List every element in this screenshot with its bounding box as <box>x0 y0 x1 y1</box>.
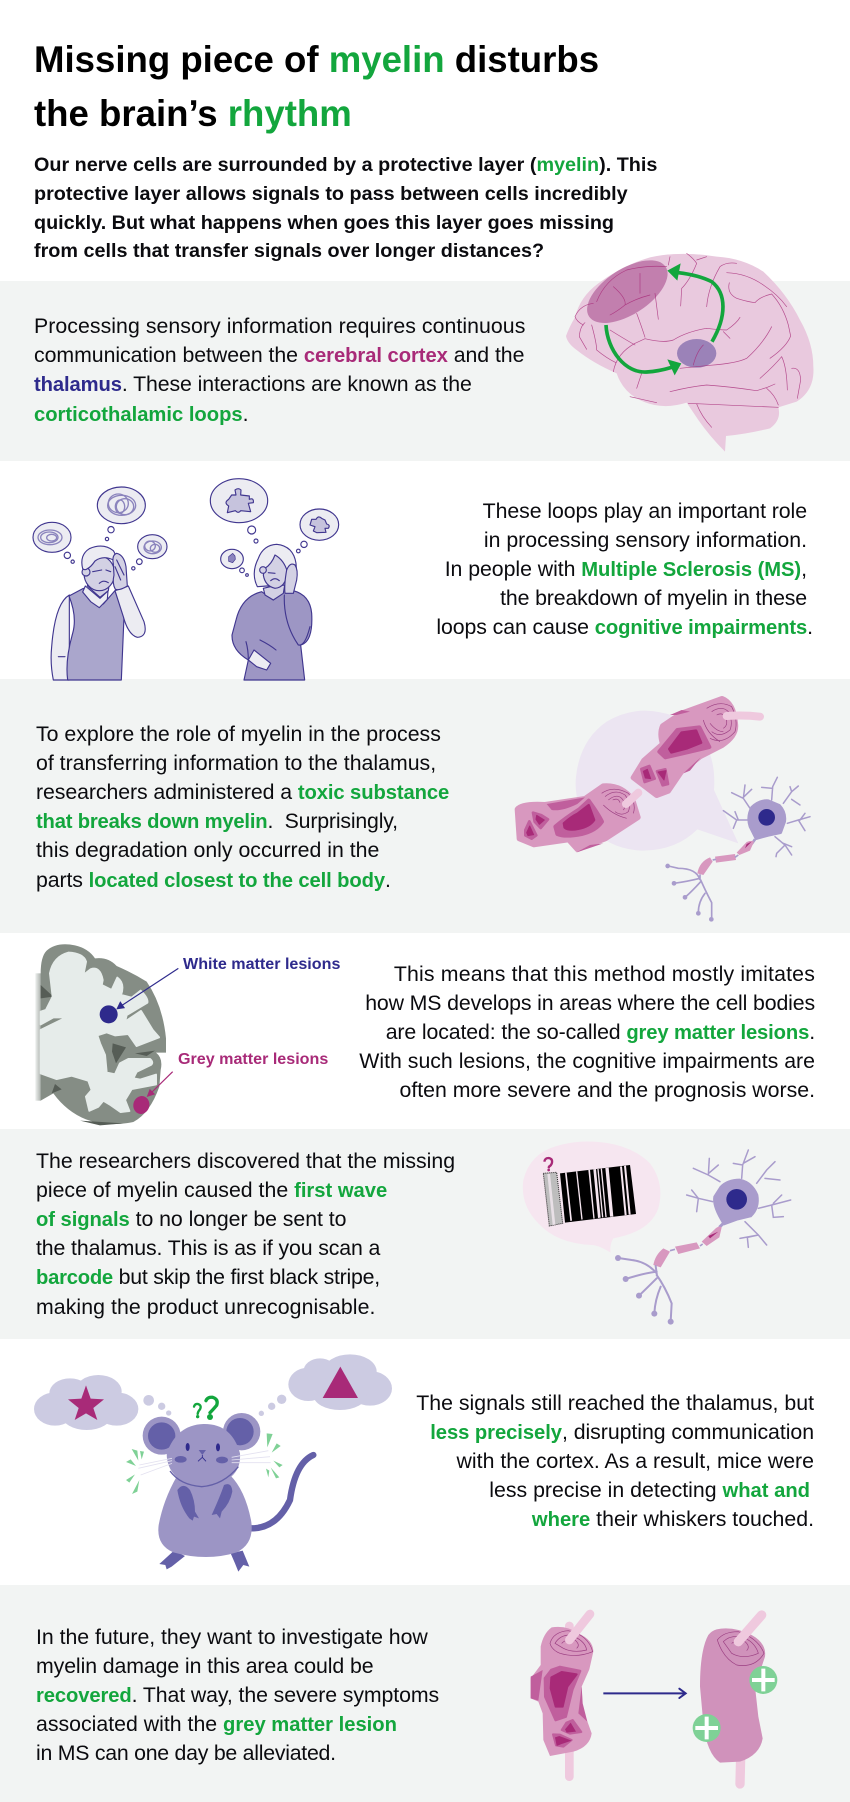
icon: confused mouse with thought clouds <box>34 1354 392 1572</box>
arrow: grey matter lesion pointer <box>148 1072 173 1096</box>
text: first wave barcode analogy: piece of myelin caused the first wave <box>36 1178 387 1202</box>
title: Missing piece of myelin disturbs <box>34 39 599 80</box>
speech bubble <box>576 711 738 851</box>
intro text: from cells that transfer signals over longer distances? <box>34 240 544 262</box>
text: first wave barcode analogy <box>36 1149 455 1319</box>
man <box>51 546 145 680</box>
text: future research: In the future, they want to investigate how <box>36 1625 428 1649</box>
text: mice whiskers: with the cortex. As a result, mice were <box>457 1449 814 1473</box>
label: white matter lesions: White matter lesions <box>183 955 340 973</box>
text: grey matter lesions explanation: how MS develops in areas where the cell bodies <box>365 991 815 1015</box>
background band: myelin section <box>0 679 850 933</box>
text: toxic substance experiment: parts located closest to the cell body. <box>36 868 391 892</box>
text: corticothalamic loops: thalamus. These interactions are known as the <box>34 372 472 396</box>
text: mice whiskers <box>416 1391 814 1531</box>
text: grey matter lesions explanation: This means that this method mostly imitates <box>394 962 815 986</box>
text: grey matter lesions explanation: are located: the so-called grey matter lesions. <box>386 1020 815 1044</box>
tail <box>252 1455 313 1528</box>
text: corticothalamic loops: communication between the cerebral cortex and the <box>34 343 524 367</box>
left cloud with star <box>34 1375 171 1430</box>
intro text: quickly. But what happens when goes this layer goes missing <box>34 212 614 234</box>
text: future research: associated with the grey matter lesion <box>36 1712 397 1736</box>
arrow <box>603 1689 686 1698</box>
question mark <box>544 1158 552 1168</box>
text: mice whiskers: where their whiskers touched. <box>532 1507 814 1531</box>
text: first wave barcode analogy: making the product unrecognisable. <box>36 1295 375 1319</box>
arrow: white matter lesion pointer <box>117 968 178 1009</box>
text: future research: myelin damage in this area could be <box>36 1654 373 1678</box>
background band: future section <box>0 1585 850 1802</box>
text: mice whiskers: The signals still reached the thalamus, but <box>416 1391 814 1415</box>
text: loops and MS <box>436 499 813 639</box>
icon: barcode bubble and neuron <box>523 1142 792 1325</box>
icon: demyelinated axon chunks and neuron in speech bubble <box>514 696 811 922</box>
intro text <box>34 154 657 262</box>
upper myelin chunk <box>633 699 760 795</box>
icon: worried man and woman with thought bubbles <box>32 478 340 681</box>
whiskers <box>138 1451 271 1475</box>
face <box>186 1443 190 1451</box>
head <box>167 1424 240 1486</box>
title: the brain’s rhythm <box>34 92 352 134</box>
man's thought bubbles <box>33 487 167 570</box>
whisker motion marks <box>126 1433 283 1494</box>
neuron <box>615 1150 791 1325</box>
axon connector <box>626 793 638 804</box>
text: corticothalamic loops <box>34 314 525 426</box>
text: toxic substance experiment: this degradation only occurred in the <box>36 838 379 862</box>
text: first wave barcode analogy: barcode but skip the first black stripe, <box>36 1265 380 1289</box>
woman's thought bubbles <box>210 479 339 576</box>
icon: brain with corticothalamic loop <box>566 253 814 452</box>
question marks <box>194 1397 217 1414</box>
woman <box>232 544 312 680</box>
text: toxic substance experiment: researchers administered a toxic substance <box>36 780 449 804</box>
text: toxic substance experiment: of transferring information to the thalamus, <box>36 751 436 775</box>
text: loops and MS: loops can cause cognitive impairments. <box>436 615 813 639</box>
text: grey matter lesions explanation: often more severe and the prognosis worse. <box>399 1078 815 1102</box>
neuron <box>665 777 810 922</box>
barcode <box>543 1165 636 1226</box>
intro text: Our nerve cells are surrounded by a protective layer (myelin). This <box>34 154 657 176</box>
text: first wave barcode analogy: of signals to no longer be sent to <box>36 1207 346 1231</box>
intro text: protective layer allows signals to pass between cells incredibly <box>34 183 628 205</box>
text: mice whiskers: less precise in detecting what and <box>489 1478 810 1502</box>
damaged chunk <box>531 1614 593 1777</box>
text: future research: in MS can one day be alleviated. <box>36 1741 336 1765</box>
text: grey matter lesions explanation <box>359 962 815 1102</box>
right cloud with triangle <box>259 1354 392 1416</box>
lower myelin chunk <box>517 786 638 853</box>
text: toxic substance experiment: To explore the role of myelin in the process <box>36 722 441 746</box>
text: corticothalamic loops: ​corticothalamic loops. <box>34 402 249 426</box>
icon: brain cross-section with lesions <box>36 944 179 1126</box>
feet <box>159 1551 249 1572</box>
title <box>34 39 599 134</box>
background band: barcode section <box>0 1129 850 1339</box>
text: toxic substance experiment: that breaks down myelin. Surprisingly, <box>36 809 398 833</box>
text: first wave barcode analogy: The researchers discovered that the missing <box>36 1149 455 1173</box>
label: grey matter lesions: Grey matter lesions <box>178 1050 328 1068</box>
text: loops and MS: These loops play an important role <box>483 499 807 523</box>
body <box>158 1475 252 1557</box>
text: corticothalamic loops: Processing sensory information requires continuous <box>34 314 525 338</box>
text: future research <box>36 1625 439 1765</box>
text: toxic substance experiment <box>36 722 449 892</box>
icon: damaged and repaired myelin with arrow <box>530 1610 778 1789</box>
repaired chunk <box>693 1615 777 1784</box>
text: loops and MS: in processing sensory information. <box>484 528 807 552</box>
text: loops and MS: In people with Multiple Sclerosis (MS), <box>445 557 807 581</box>
text: first wave barcode analogy: the thalamus. This is as if you scan a <box>36 1236 380 1260</box>
text: grey matter lesions explanation: With such lesions, the cognitive impairments are <box>359 1049 815 1073</box>
ears <box>143 1417 181 1455</box>
background band: cortex section <box>0 281 850 461</box>
text: future research: recovered. That way, the severe symptoms <box>36 1683 439 1707</box>
text: loops and MS: the breakdown of myelin in these <box>500 586 807 610</box>
text: mice whiskers: less precisely, disrupting communication <box>430 1420 814 1444</box>
arms <box>177 1484 232 1521</box>
speech bubble <box>523 1142 660 1253</box>
